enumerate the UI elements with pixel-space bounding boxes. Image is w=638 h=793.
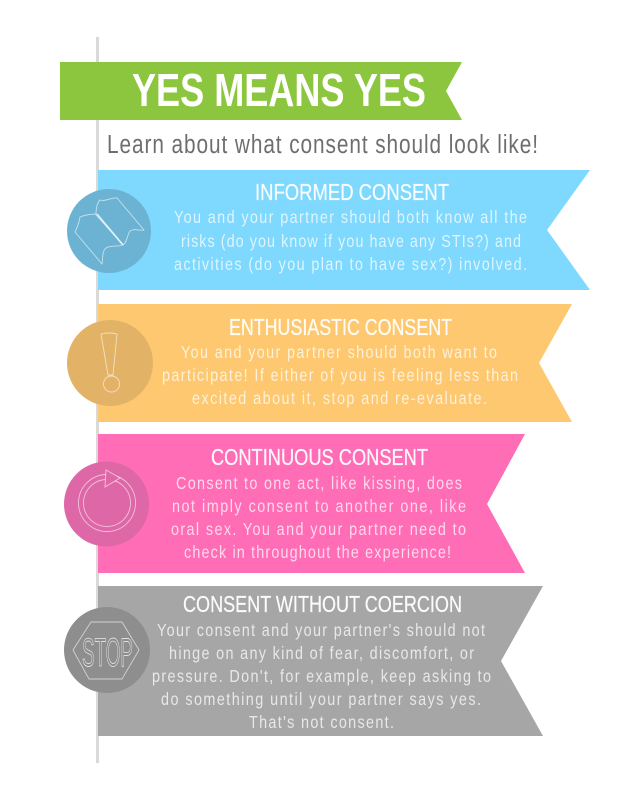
title banner (60, 62, 462, 120)
heading: ENTHUSIASTIC CONSENT (229, 314, 452, 340)
icon: open book (67, 189, 151, 273)
text block: That's not consent. (249, 713, 394, 732)
text block: risks (do you know if you have any STIs?) and (181, 232, 521, 251)
heading: INFORMED CONSENT (255, 179, 449, 205)
panel: informed consent (67, 170, 590, 290)
title: YES MEANS YES (132, 64, 426, 116)
text block (152, 621, 491, 732)
text block: oral sex. You and your partner need to (171, 520, 466, 539)
text block: You and your partner should both want to (181, 343, 497, 362)
heading: CONTINUOUS CONSENT (211, 444, 428, 470)
text block: hinge on any kind of fear, discomfort, or (169, 644, 475, 663)
text block (171, 474, 466, 562)
text block: activities (do you plan to have sex?) involved. (174, 255, 527, 274)
heading: CONSENT WITHOUT COERCION (183, 591, 462, 617)
text block: Consent to one act, like kissing, does (176, 474, 462, 493)
icon: stop sign (64, 607, 150, 693)
icon: circular arrow (64, 462, 149, 546)
text block: excited about it, stop and re-evaluate. (192, 389, 487, 408)
text block: check in throughout the experience! (184, 543, 451, 562)
text block (162, 343, 518, 408)
panel: continuous consent (64, 434, 525, 573)
subtitle: Learn about what consent should look like! (107, 130, 538, 159)
text block: Your consent and your partner's should not (157, 621, 485, 640)
text block: do something until your partner says yes. (161, 690, 481, 709)
icon: stop sign: STOP (82, 631, 133, 675)
text block: participate! If either of you is feeling less than (162, 366, 518, 385)
text block (174, 208, 527, 274)
text block: pressure. Don't, for example, keep asking to (152, 667, 491, 686)
text block: You and your partner should both know all the (174, 208, 527, 227)
icon: exclamation mark (67, 320, 153, 406)
panel: enthusiastic consent (67, 304, 572, 422)
text block: not imply consent to another one, like (172, 497, 466, 516)
panel: consent without coercion (64, 586, 543, 736)
